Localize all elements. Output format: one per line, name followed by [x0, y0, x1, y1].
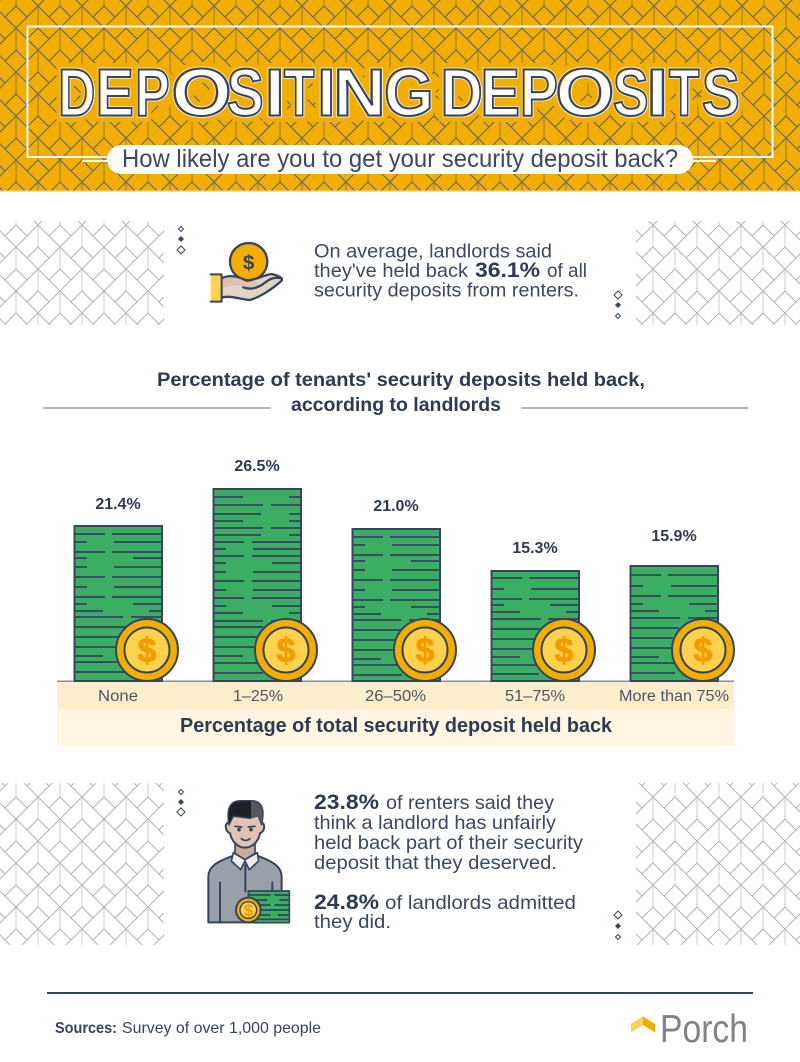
axis title: Percentage of total security deposit held back: [180, 715, 613, 737]
title: Depositing Deposits: P: [135, 56, 170, 130]
title: Depositing Deposits: I: [648, 56, 670, 132]
title: Depositing Deposits: S: [702, 56, 740, 130]
title: Depositing Deposits: T: [284, 56, 314, 130]
bar: 51–75% 15.3%: [491, 540, 595, 681]
bar chart: [74, 458, 734, 681]
header banner: [0, 0, 800, 192]
title: Depositing Deposits: T: [669, 56, 699, 130]
title: Depositing Deposits: S: [702, 56, 740, 130]
title: Depositing Deposits: D: [58, 56, 95, 130]
text: landlords held back 36.1%: they've held back: [314, 260, 468, 282]
bills: [248, 891, 289, 923]
title: Depositing Deposits: P: [520, 56, 558, 130]
bar: More than 75% 15.9%: 15.9%: [651, 528, 697, 545]
collar: [231, 853, 259, 870]
diamonds: top right: [614, 291, 622, 318]
icon: man with money: $: [244, 901, 254, 920]
title: Depositing Deposits: O: [555, 56, 614, 130]
title: Depositing Deposits: T: [284, 56, 314, 130]
title: Depositing Deposits: S: [228, 56, 265, 132]
title: Depositing Deposits: P: [136, 56, 171, 132]
chart heading: Percentage of tenants' security deposits held back,: [157, 370, 645, 391]
title: Depositing Deposits: S: [227, 56, 264, 130]
title: Depositing Deposits: E: [480, 56, 520, 130]
title: Depositing Deposits: S: [703, 56, 741, 132]
title: Depositing Deposits: E: [97, 56, 135, 132]
title: Depositing Deposits: D: [58, 56, 95, 130]
coin: $: [138, 632, 157, 670]
text: renters and landlords: [314, 791, 583, 933]
axis labels: More than 75%: [619, 688, 729, 705]
title: Depositing Deposits: N: [335, 56, 387, 132]
title: Depositing Deposits: O: [171, 56, 232, 130]
text: renters and landlords: held back part of their security: [314, 832, 583, 854]
title: Depositing Deposits: N: [333, 56, 386, 130]
title: Depositing Deposits: D: [440, 56, 483, 130]
title: Depositing Deposits: N: [333, 56, 386, 130]
axis labels: 26–50%: [365, 688, 426, 705]
axis band: [57, 680, 734, 746]
title: Depositing Deposits: I: [265, 56, 285, 130]
title: Depositing Deposits: T: [284, 56, 314, 130]
title: Depositing Deposits: T: [669, 56, 699, 130]
title: Depositing Deposits: S: [613, 56, 649, 130]
title: Depositing Deposits: D: [440, 56, 483, 130]
bar: 26–50% 21.0%: [352, 498, 456, 681]
title: Depositing Deposits: T: [669, 56, 699, 130]
title: Depositing Deposits: I: [317, 56, 335, 130]
pattern panel: bottom right: [636, 783, 800, 945]
text: renters and landlords: they did.: [314, 911, 391, 933]
title: Depositing Deposits: I: [317, 56, 335, 130]
shirt: [208, 856, 282, 922]
neck: [235, 840, 255, 860]
sources: Survey of over 1,000 people: [122, 1020, 321, 1037]
title: Depositing Deposits: S: [613, 56, 649, 130]
title: Depositing Deposits: E: [96, 56, 134, 130]
title: Depositing Deposits: P: [135, 56, 170, 130]
title: Depositing Deposits: G: [384, 56, 434, 130]
title: Depositing Deposits: T: [670, 56, 701, 132]
text: renters and landlords: of landlords admitted: [385, 892, 576, 914]
bar: None 21.4%: 21.4%: [95, 496, 141, 513]
title: Depositing Deposits: G: [386, 56, 435, 132]
title frame: [28, 26, 772, 161]
pattern panel: bottom left: [0, 783, 164, 945]
title: Depositing Deposits: E: [480, 56, 520, 130]
title: Depositing Deposits: S: [227, 56, 264, 130]
title: Depositing Deposits: T: [285, 56, 316, 132]
title: Depositing Deposits: I: [317, 56, 335, 130]
coin: $: [416, 632, 435, 670]
sources: Sources:: [55, 1020, 117, 1037]
title: Depositing Deposits: E: [482, 56, 522, 132]
title: Depositing Deposits: T: [669, 56, 699, 130]
icon: hand holding coin: $: [243, 251, 255, 274]
title: Depositing Deposits: I: [646, 56, 668, 130]
text: renters and landlords: of renters said they: [386, 792, 554, 814]
diamonds: top left: [177, 226, 185, 254]
title: Depositing Deposits: P: [520, 56, 558, 130]
title: Depositing Deposits: S: [702, 56, 740, 130]
title: Depositing Deposits: E: [480, 56, 520, 130]
chart heading: according to landlords: [291, 395, 501, 416]
title: Depositing Deposits: O: [171, 56, 232, 130]
axis labels: 51–75%: [505, 688, 565, 705]
title: Depositing Deposits: I: [266, 56, 286, 132]
logo: Porch: [631, 1008, 748, 1051]
title: Depositing Deposits: O: [557, 56, 616, 132]
coin: $: [555, 632, 574, 670]
icon: man with money: [208, 801, 289, 923]
coin: [255, 619, 317, 681]
footer rule: [47, 992, 753, 994]
pattern panel: top right: [636, 221, 800, 325]
coin: [394, 619, 456, 681]
title: Depositing Deposits: D: [440, 56, 483, 130]
icon: hand holding coin: [211, 243, 282, 302]
coin: [533, 619, 595, 681]
text: renters and landlords: think a landlord has unfairly: [314, 812, 556, 834]
title: Depositing Deposits: O: [171, 56, 232, 130]
title: Depositing Deposits: S: [613, 56, 649, 130]
subtitle pill: How likely are you to get your security deposit back?: [122, 145, 678, 173]
title: Depositing Deposits: G: [384, 56, 434, 130]
title: Depositing Deposits: S: [614, 56, 650, 132]
title: Depositing Deposits: E: [96, 56, 134, 130]
chart heading: [43, 370, 748, 416]
title: Depositing Deposits: D: [58, 56, 95, 130]
title: Depositing Deposits: S: [702, 56, 740, 130]
text: renters and landlords: 24.8%: [314, 891, 379, 914]
title: Depositing Deposits: P: [135, 56, 170, 130]
title: Depositing Deposits: S: [227, 56, 264, 130]
text: landlords held back 36.1%: of all: [547, 260, 587, 282]
title: Depositing Deposits: N: [333, 56, 386, 130]
coin: [672, 619, 734, 681]
title: Depositing Deposits: E: [96, 56, 134, 130]
head: [226, 813, 264, 848]
title: Depositing Deposits: O: [555, 56, 614, 130]
hair: [228, 801, 263, 825]
coin: [116, 619, 178, 681]
axis labels: None: [98, 688, 138, 705]
title: Depositing Deposits: P: [135, 56, 170, 130]
title: Depositing Deposits: I: [319, 56, 337, 132]
axis labels: [98, 688, 729, 705]
title: Depositing Deposits: [58, 56, 741, 132]
bar: More than 75% 15.9%: [630, 528, 734, 681]
title: Depositing Deposits: E: [96, 56, 134, 130]
title: Depositing Deposits: D: [440, 56, 483, 130]
bar: 51–75% 15.3%: 15.3%: [512, 540, 558, 557]
title: Depositing Deposits: I: [646, 56, 668, 130]
title: Depositing Deposits: G: [384, 56, 434, 130]
coin: [236, 898, 261, 922]
title: Depositing Deposits: I: [646, 56, 668, 130]
title: Depositing Deposits: S: [613, 56, 649, 130]
title: Depositing Deposits: N: [333, 56, 386, 130]
bar: 1–25% 26.5%: [213, 458, 317, 681]
pattern panel: top left: [0, 221, 164, 325]
title: Depositing Deposits: E: [480, 56, 520, 130]
title: Depositing Deposits: I: [646, 56, 668, 130]
logo: Porch: Porch: [660, 1008, 748, 1051]
title: Depositing Deposits: O: [555, 56, 614, 130]
text: landlords held back 36.1%: security deposits from renters.: [314, 280, 579, 302]
title: Depositing Deposits: I: [265, 56, 285, 130]
title: Depositing Deposits: P: [520, 56, 558, 130]
title: Depositing Deposits: P: [520, 56, 558, 130]
title: Depositing Deposits: O: [173, 56, 233, 132]
text: landlords held back 36.1%: On average, landlords said: [314, 240, 552, 262]
title: Depositing Deposits: S: [227, 56, 264, 130]
text: renters and landlords: 23.8%: [314, 791, 379, 814]
coin: $: [277, 632, 296, 670]
bar: None 21.4%: [74, 496, 178, 681]
axis labels: 1–25%: [233, 688, 283, 705]
diamonds: bottom left: [177, 790, 185, 816]
title: Depositing Deposits: D: [60, 56, 97, 132]
bar: 1–25% 26.5%: 26.5%: [234, 458, 280, 475]
title: Depositing Deposits: D: [58, 56, 95, 130]
text: landlords held back 36.1%: 36.1%: [475, 259, 540, 282]
bar: 26–50% 21.0%: 21.0%: [373, 498, 419, 515]
text: renters and landlords: deposit that they deserved.: [314, 852, 557, 874]
title: Depositing Deposits: I: [265, 56, 285, 130]
title: Depositing Deposits: T: [284, 56, 314, 130]
title: Depositing Deposits: D: [442, 56, 484, 132]
title: Depositing Deposits: I: [265, 56, 285, 130]
title: Depositing Deposits: I: [317, 56, 335, 130]
diamonds: bottom right: [614, 911, 622, 940]
text: landlords held back 36.1%: [314, 240, 587, 302]
title: Depositing Deposits: G: [384, 56, 434, 130]
coin: $: [694, 632, 713, 670]
title: Depositing Deposits: O: [555, 56, 614, 130]
title: Depositing Deposits: O: [171, 56, 232, 130]
title: Depositing Deposits: P: [521, 56, 560, 132]
